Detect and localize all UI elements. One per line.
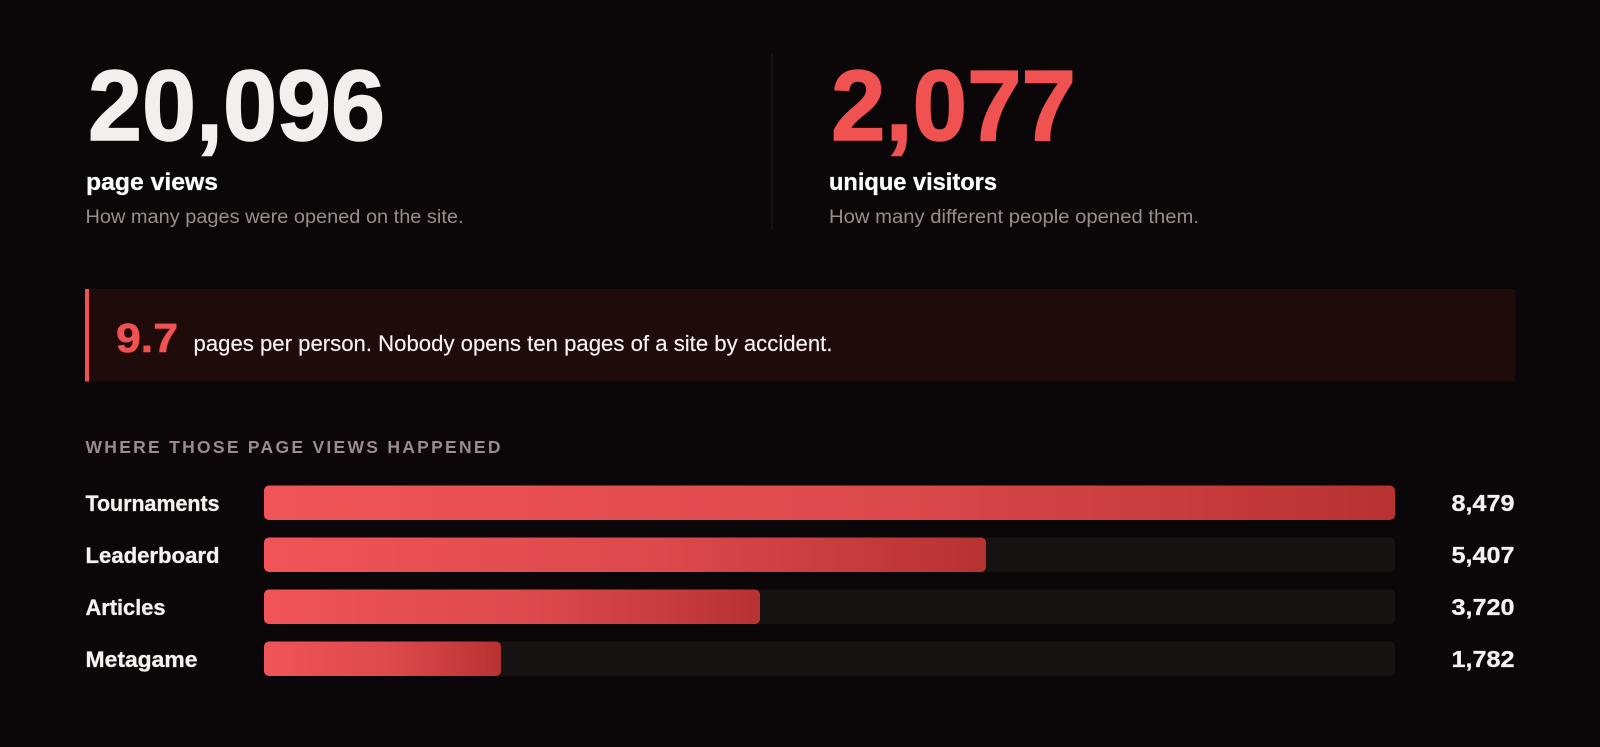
bar row: Metagame <box>86 642 1514 676</box>
section heading: WHERE THOSE PAGE VIEWS HAPPENED <box>86 437 500 457</box>
bar row: Articles: 3,720 <box>1452 594 1514 620</box>
bar row: Tournaments <box>86 486 1514 520</box>
bar row: Leaderboard <box>86 538 1514 572</box>
stat description: unique visitors: How many different people opened them. <box>829 207 1199 228</box>
callout: pages per person <box>85 289 1515 382</box>
panel: unique visitors stat <box>829 50 1199 228</box>
bar row: Tournaments: 8,479 <box>1452 490 1514 516</box>
bar chart: page views by section <box>86 486 1514 676</box>
bar row: Articles <box>86 590 1514 624</box>
panel: page views stat <box>86 50 464 228</box>
big number: page views: 20,096 <box>88 50 385 162</box>
bar row: Tournaments: Tournaments <box>86 491 220 516</box>
bar row: Metagame: Metagame <box>86 647 198 672</box>
stat label: unique visitors: unique visitors <box>829 169 997 196</box>
bar row: Metagame: 1,782 <box>1452 646 1514 672</box>
bar row: Leaderboard: Leaderboard <box>86 543 220 568</box>
bar row: Articles: Articles <box>86 595 166 620</box>
callout figure: 9.7 <box>116 315 178 361</box>
stat label: page views: page views <box>86 169 218 196</box>
stat description: page views: How many pages were opened on the site. <box>86 207 464 228</box>
callout sentence: pages per person. Nobody opens ten pages of a site by accident. <box>194 331 832 356</box>
big number: unique visitors: 2,077 <box>831 50 1076 162</box>
bar row: Leaderboard: 5,407 <box>1452 542 1514 568</box>
